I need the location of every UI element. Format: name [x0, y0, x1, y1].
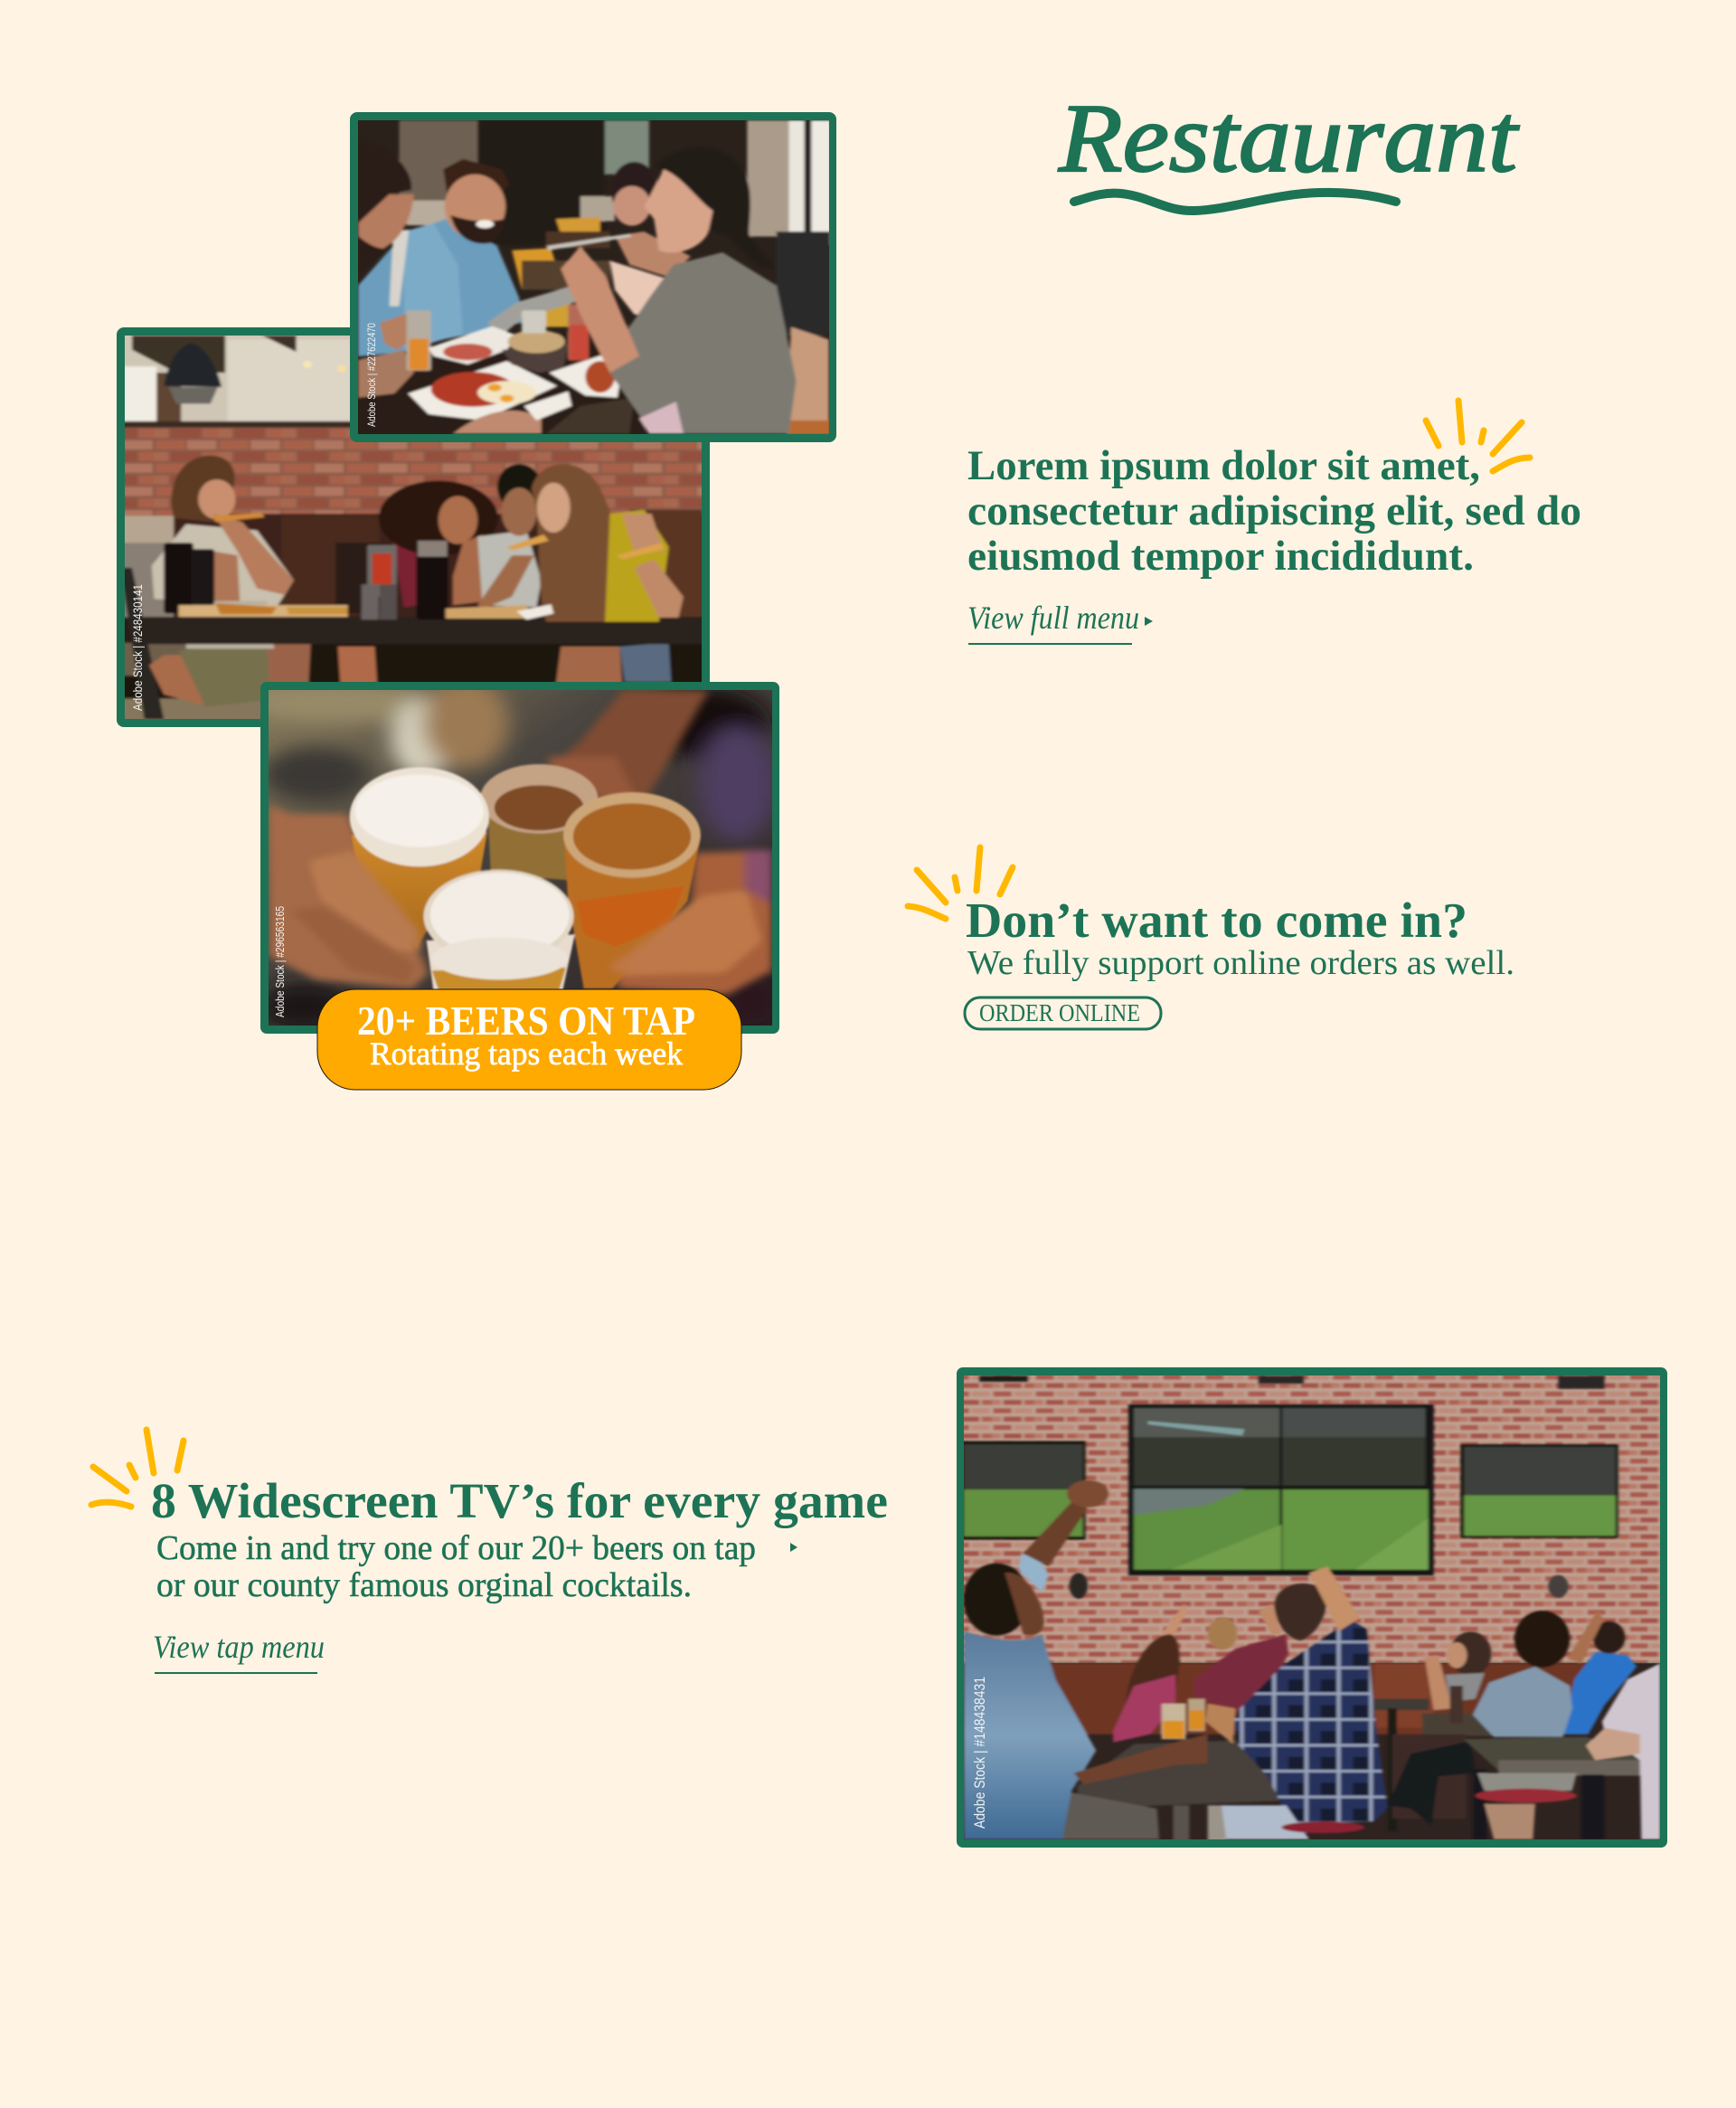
heading: 8 Widescreen TV’s for every game — [151, 1473, 888, 1528]
link underline — [968, 643, 1132, 645]
man in blue — [1563, 1652, 1637, 1735]
icon: spark — [1426, 401, 1530, 471]
left TV — [961, 1442, 1086, 1539]
text block: widescreen TVs — [91, 1430, 888, 1674]
link underline — [155, 1672, 317, 1674]
watermark: Adobe Stock | #227622470 — [365, 323, 378, 427]
man in maroon — [1194, 1634, 1288, 1712]
image — [120, 331, 708, 725]
icon: spark — [91, 1430, 184, 1507]
frame — [117, 327, 710, 727]
button: order online — [965, 997, 1161, 1029]
badge shape — [317, 989, 741, 1090]
seated woman and clapping hands — [1450, 1631, 1491, 1676]
back beer — [486, 817, 568, 881]
heading: Don’t want to come in? — [966, 893, 1467, 948]
link: view full menu: View full menu — [967, 600, 1139, 636]
intro line 1: Lorem ipsum dolor sit amet, — [967, 442, 1480, 489]
badge subheading: Rotating taps each week — [370, 1035, 683, 1072]
button label: ORDER ONLINE — [979, 999, 1140, 1026]
centre TV — [1128, 1404, 1434, 1575]
frame — [350, 112, 836, 442]
intro line 3: eiusmod tempor incididunt. — [967, 533, 1474, 580]
watermark: Adobe Stock | #248430141 — [130, 584, 145, 711]
woman in pink — [1125, 1633, 1182, 1701]
photo: four beers clinking — [248, 678, 784, 1034]
text block: intro — [967, 401, 1581, 645]
callout: 20+ beers on tap — [317, 989, 741, 1090]
fingers over the glasses — [312, 850, 420, 950]
body line 2: or our county famous orginal cocktails. — [156, 1566, 692, 1604]
title — [1058, 85, 1520, 211]
frame — [260, 682, 779, 1034]
image — [958, 1373, 1669, 1844]
arrow — [1145, 617, 1153, 626]
beers — [1162, 1704, 1185, 1739]
left beer — [352, 832, 487, 950]
right table — [1464, 1737, 1641, 1774]
intro line 2: consectetur adipiscing elit, sed do — [967, 487, 1581, 534]
frame — [957, 1367, 1667, 1848]
text block: online orders — [908, 847, 1514, 1029]
image — [355, 116, 835, 440]
couch — [1049, 1663, 1589, 1735]
woman in denim jacket — [1473, 1667, 1572, 1737]
badge heading: 20+ BEERS ON TAP — [357, 998, 695, 1044]
right TV — [1460, 1444, 1618, 1538]
arrow — [790, 1543, 797, 1552]
wall lights — [1070, 1573, 1088, 1599]
watermark: Adobe Stock | #296563165 — [273, 906, 287, 1017]
subheading: We fully support online orders as well. — [967, 944, 1514, 982]
man in plaid shirt — [1233, 1620, 1388, 1823]
right beer — [564, 838, 700, 988]
front beer — [427, 934, 575, 992]
link: view tap menu: View tap menu — [153, 1629, 325, 1665]
image — [269, 690, 772, 1026]
title squiggle underline — [1074, 193, 1396, 211]
button outline — [965, 997, 1161, 1029]
body line 1: Come in and try one of our 20+ beers on tap — [156, 1529, 756, 1567]
icon: spark — [908, 847, 1013, 919]
photo: friends eating pizza at a brick wall booth — [117, 327, 710, 727]
watermark: Adobe Stock | #148438431 — [971, 1677, 988, 1829]
man in striped shirt — [1602, 1663, 1660, 1839]
photo: fans watching football on big screens — [957, 1367, 1669, 1848]
man in denim — [1062, 1791, 1159, 1839]
centre table — [1078, 1739, 1288, 1809]
title text: Restaurant — [1058, 85, 1520, 193]
photo: friends sharing brunch in a restaurant — [350, 112, 836, 442]
